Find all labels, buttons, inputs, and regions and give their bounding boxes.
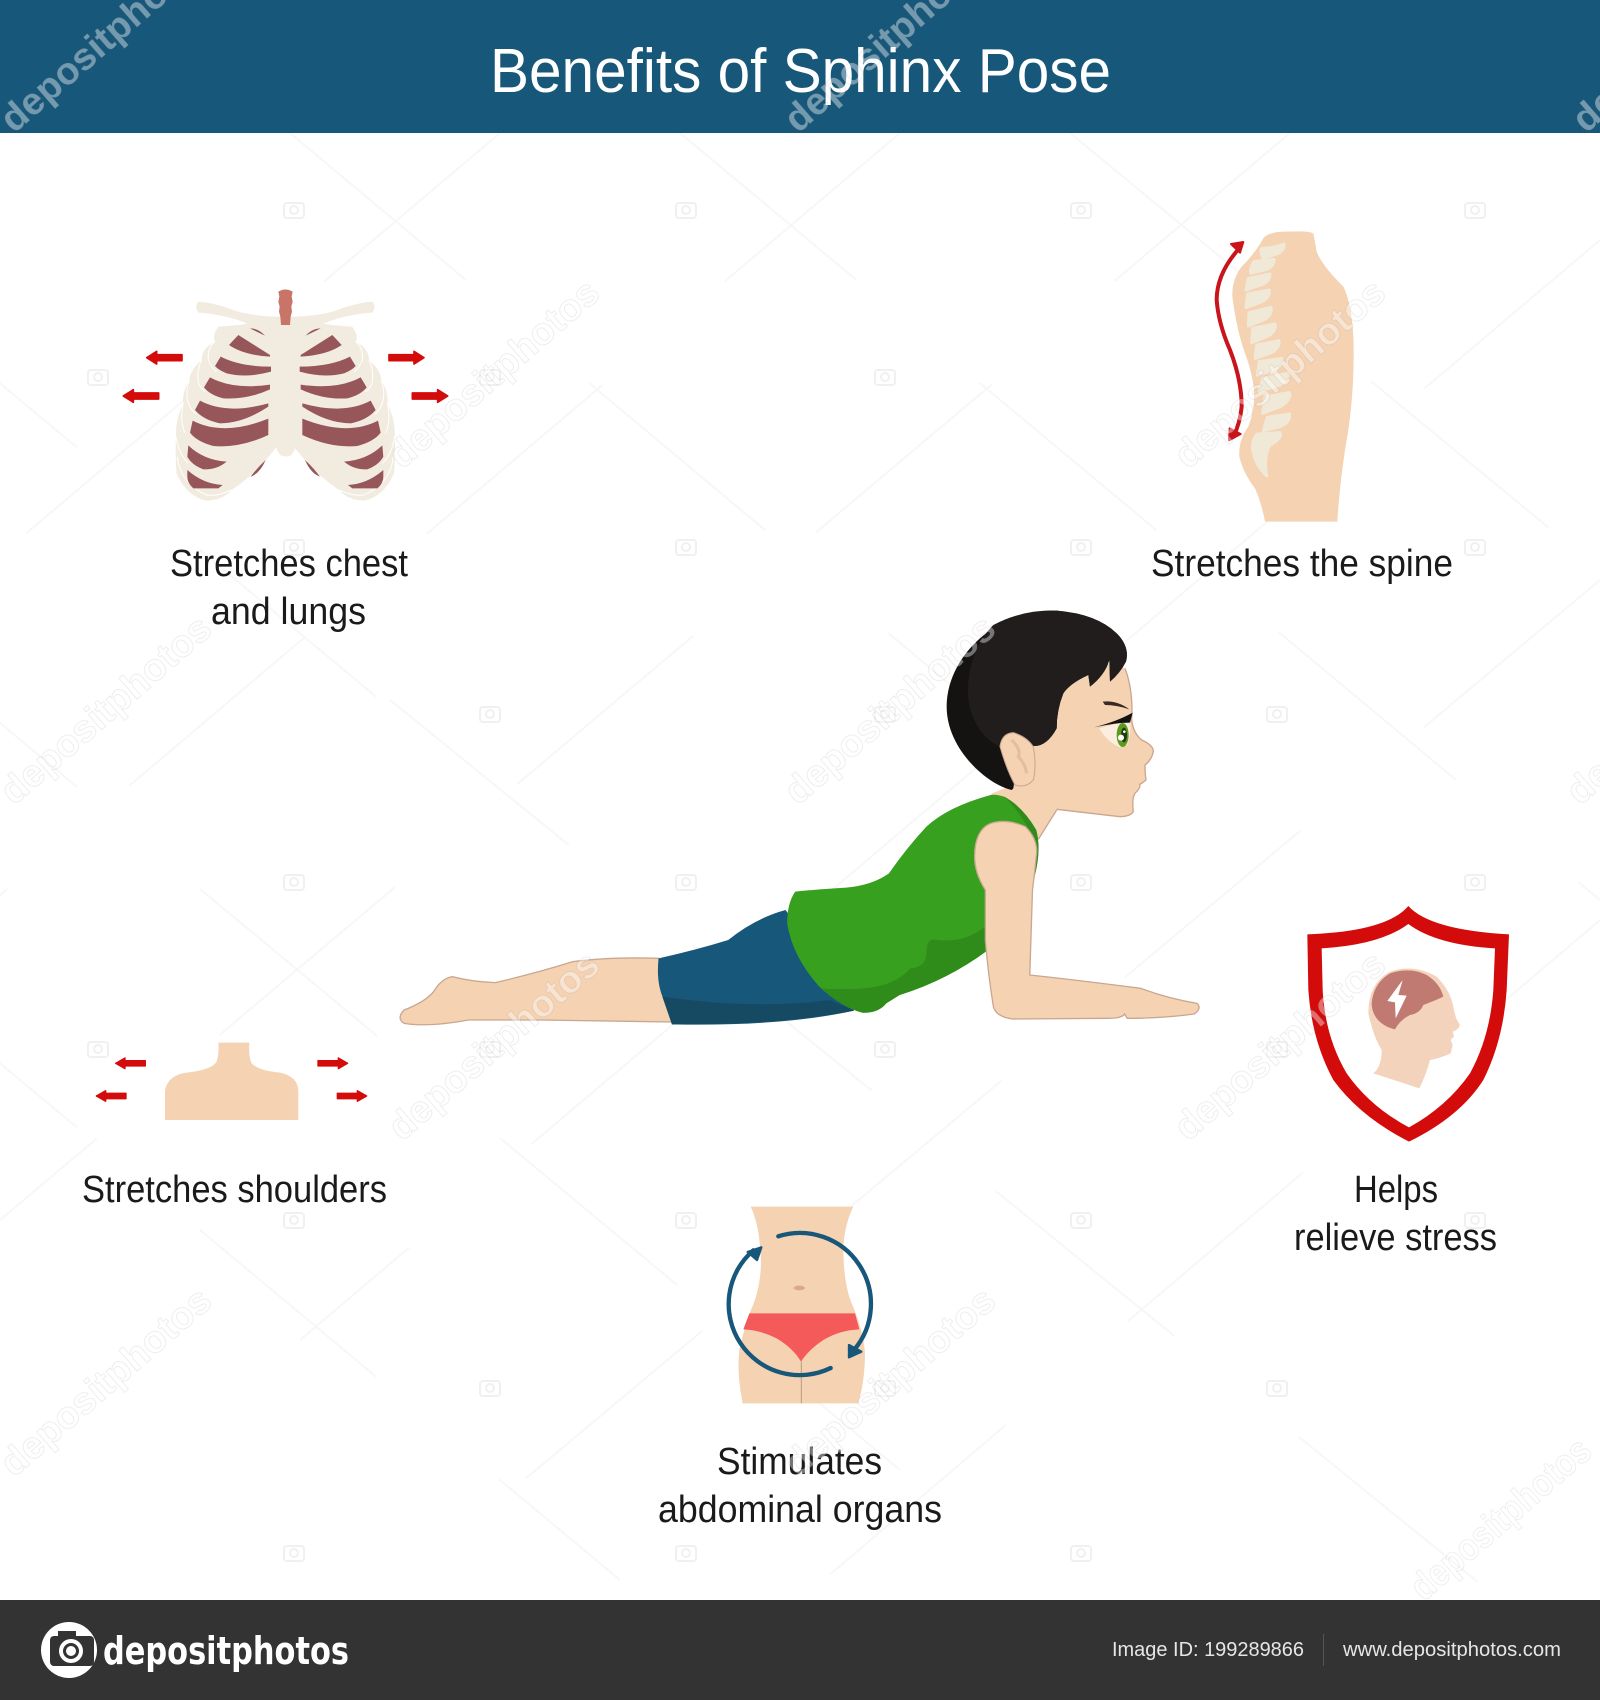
label: stimulates abdominal organs [658, 1441, 942, 1531]
infographic: depositphotos [380, 271, 608, 477]
infographic: depositphotos [1166, 943, 1394, 1149]
label: stretches shoulders: Stretches shoulders [82, 1169, 387, 1211]
head [947, 611, 1153, 817]
image id: Image ID: 199289866 [1112, 1639, 1304, 1661]
logo wordmark: depositphotos [103, 1629, 349, 1673]
infographic: depositphotos [380, 943, 608, 1149]
arrow: spine curve [1217, 242, 1243, 440]
panel: chest and lungs [123, 289, 448, 633]
label: stimulates abdominal organs: abdominal organs [658, 1489, 942, 1531]
label: helps relieve stress: Helps [1354, 1169, 1438, 1211]
shorts [658, 910, 854, 1025]
icon: shield with head [1307, 906, 1509, 1142]
neck [991, 785, 1058, 840]
legs [400, 958, 672, 1025]
infographic: depositphotos [776, 607, 1004, 813]
panel: spine [1151, 231, 1453, 585]
figure: child in sphinx pose [400, 611, 1199, 1025]
icon: torso with spine [1232, 231, 1354, 522]
label: stretches chest and lungs: Stretches chest [170, 543, 408, 585]
label: stretches chest and lungs [170, 543, 408, 633]
infographic: depositphotos [1166, 271, 1394, 477]
panel: stress relief [1294, 906, 1509, 1259]
panel: abdominal organs [658, 1207, 942, 1531]
icon: abdomen [739, 1207, 865, 1403]
title: Benefits of Sphinx Pose [490, 37, 1111, 106]
logo icon: camera [41, 1622, 97, 1678]
arm [975, 821, 1199, 1019]
infographic: depositphotos [776, 1279, 1004, 1485]
label: helps relieve stress: relieve stress [1294, 1217, 1497, 1259]
website: www.depositphotos.com [1342, 1639, 1561, 1661]
arrows: chest expansion [123, 351, 448, 402]
header band [0, 0, 1600, 133]
arrows: circular massage [729, 1233, 871, 1375]
icon: shoulders [165, 1043, 298, 1120]
label: stimulates abdominal organs: Stimulates [717, 1441, 882, 1483]
label: helps relieve stress [1294, 1169, 1497, 1259]
label: stretches chest and lungs: and lungs [211, 591, 366, 633]
footer bar [0, 1600, 1600, 1700]
icon: rib cage [176, 289, 395, 501]
arrows: shoulder stretch [96, 1058, 367, 1101]
label: stretches the spine: Stretches the spine [1151, 543, 1453, 585]
panel: shoulders [82, 1043, 387, 1211]
shirt [787, 795, 1039, 1013]
